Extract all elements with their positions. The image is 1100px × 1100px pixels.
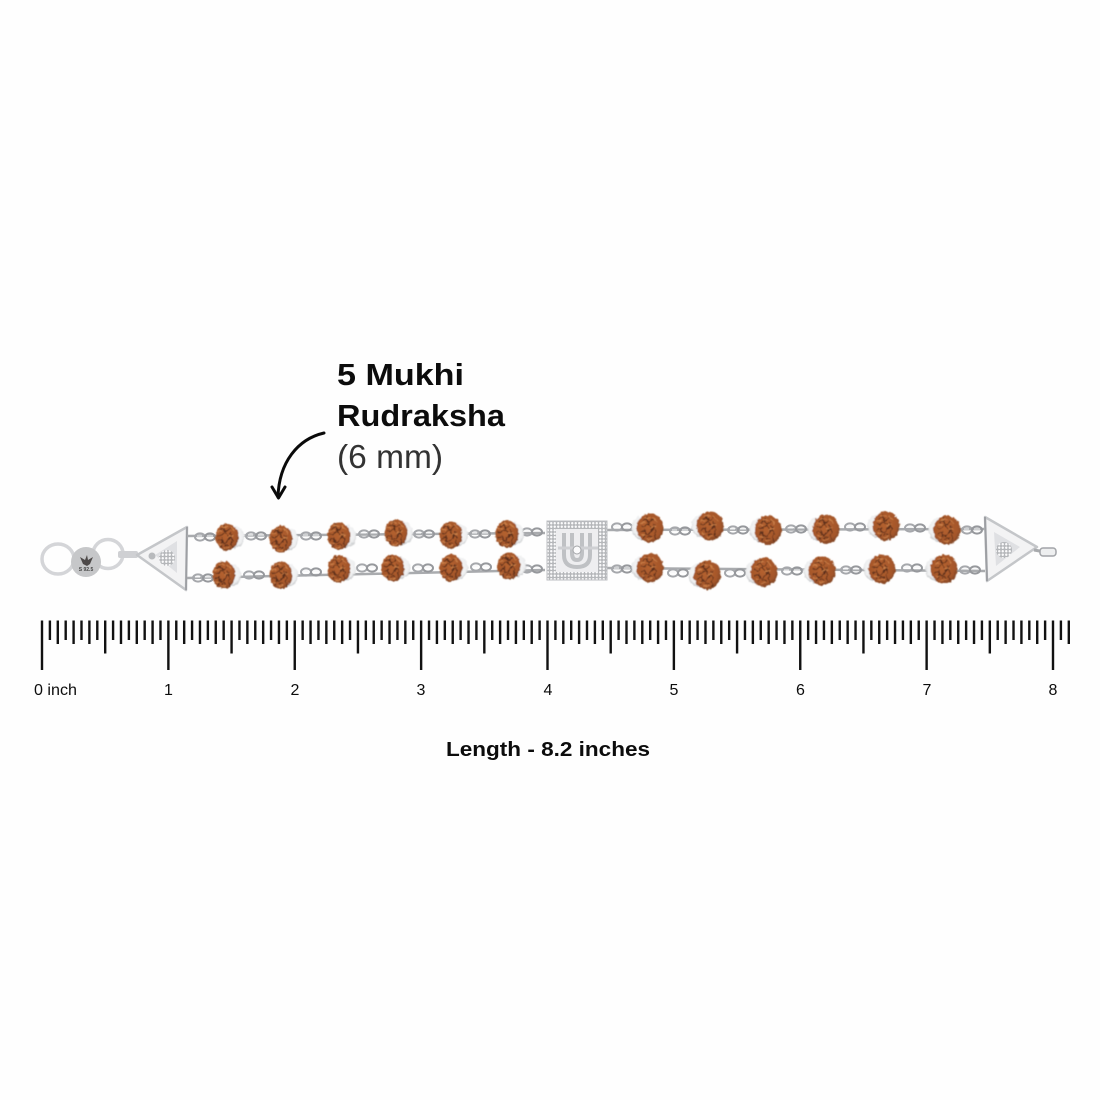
clasp: left ring and hallmark disc: S 92.5: [79, 567, 93, 573]
arrow: points from heading to bead: [272, 433, 324, 498]
bottom row rudraksha beads: [212, 552, 958, 590]
eighth-inch ticks: [57, 620, 1070, 644]
ruler labels: 4: [544, 682, 553, 699]
right triangle ornament and clasp tab: [985, 517, 1056, 581]
ruler labels: 5: [670, 682, 679, 699]
sixteenth-inch ticks: [49, 620, 1070, 640]
caption: total length: Length - 8.2 inches: [446, 738, 650, 761]
half-inch ticks: [104, 620, 1070, 654]
quarter-inch ticks: [72, 620, 1070, 644]
top row rudraksha beads: [216, 512, 960, 552]
top chain: [187, 523, 985, 541]
ruler labels: 6: [796, 682, 805, 699]
heading: 5 Mukhi Rudraksha (6 mm): Rudraksha: [337, 398, 506, 433]
centre square pendant with crystals: [547, 521, 607, 580]
heading: 5 Mukhi Rudraksha (6 mm): [337, 357, 506, 475]
bracelet: [42, 512, 1056, 590]
ruler labels: [34, 682, 1058, 699]
clasp: left ring and hallmark disc: [42, 540, 138, 577]
ruler labels: 1: [164, 682, 173, 699]
ruler labels: 2: [291, 682, 300, 699]
heading: 5 Mukhi Rudraksha (6 mm): 5 Mukhi: [337, 357, 464, 392]
ruler labels: 0 inch: [34, 682, 77, 699]
heading: 5 Mukhi Rudraksha (6 mm): (6 mm): [337, 438, 443, 475]
left triangle ornament: [137, 527, 187, 590]
ruler labels: 7: [923, 682, 932, 699]
ruler labels: 3: [417, 682, 426, 699]
inch ticks: [41, 620, 1056, 670]
bottom chain: [187, 563, 985, 582]
ruler scale: [41, 630, 1070, 645]
ruler labels: 8: [1049, 682, 1058, 699]
